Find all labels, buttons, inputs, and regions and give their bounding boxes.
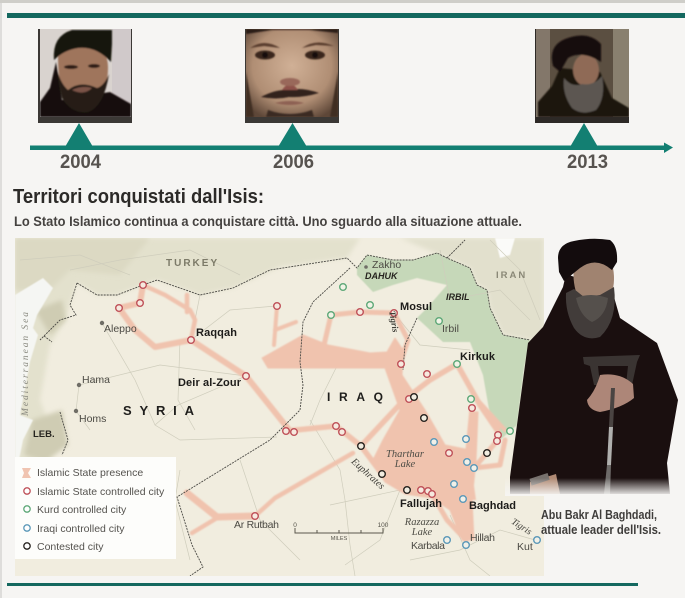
legend <box>15 457 176 559</box>
year 2004: 2004 <box>60 152 101 173</box>
map labels: Ar Rutbah <box>234 519 279 531</box>
cities: Islamic State controlled <box>116 282 501 519</box>
map labels: Hillah <box>470 532 495 544</box>
year 2013: 2013 <box>567 152 608 173</box>
map labels: Kirkuk <box>460 351 496 363</box>
map labels: Euphrates <box>348 456 387 492</box>
map labels: IRAN <box>496 270 527 281</box>
map of Syria and Iraq <box>15 238 544 576</box>
map labels: Zakho <box>372 259 401 271</box>
map labels: Tharthar <box>386 449 425 460</box>
Kurdish region <box>357 253 530 440</box>
timeline arrow <box>30 142 673 153</box>
map labels: Mosul <box>400 301 432 313</box>
portrait 2013 <box>535 29 629 123</box>
map labels: Kut <box>517 541 533 553</box>
map labels: TURKEY <box>166 258 219 269</box>
map labels <box>21 258 533 553</box>
map labels: Karbala <box>411 540 445 552</box>
subheading: Lo Stato Islamico continua a conquistare città. Uno sguardo alla situazione attuale. <box>14 213 522 229</box>
scale bar: MILES <box>331 536 348 542</box>
heading: Territori conquistati dall'Isis: <box>13 185 264 208</box>
map labels: DAHUK <box>365 271 399 281</box>
map labels: Lake <box>411 527 433 538</box>
legend: Islamic State controlled city: Islamic State controlled city <box>37 486 165 498</box>
map labels: Homs <box>79 413 106 425</box>
caption <box>541 507 661 537</box>
year 2006: 2006 <box>273 152 314 173</box>
map labels: Tigris <box>387 310 401 334</box>
map labels: Aleppo <box>104 323 137 335</box>
legend: Contested city: Contested city <box>37 541 104 553</box>
portrait 2006 <box>245 29 339 123</box>
map labels: Fallujah <box>400 498 442 510</box>
map labels: IRBIL <box>446 292 470 302</box>
marker 2006 <box>278 123 307 147</box>
map labels: Baghdad <box>469 500 516 512</box>
map labels: IRAQ <box>327 390 383 404</box>
caption: attuale leader dell'Isis. <box>541 522 661 537</box>
map labels: SYRIA <box>123 403 195 418</box>
Islamic State presence areas <box>119 285 505 540</box>
bottom rule <box>7 583 638 586</box>
portrait: Abu Bakr Al Baghdadi <box>505 239 685 496</box>
map labels: Irbil <box>442 323 459 335</box>
map labels: LEB. <box>33 429 55 440</box>
caption: Abu Bakr Al Baghdadi, <box>541 507 657 522</box>
road network <box>20 240 540 576</box>
cities: contested <box>358 394 490 493</box>
top rule <box>7 13 685 18</box>
portrait 2004 <box>38 29 132 123</box>
terrain: Turkey and west <box>15 238 360 470</box>
map labels: Tigris <box>509 517 533 538</box>
map labels: Hama <box>82 374 110 386</box>
map labels: Lake <box>394 459 416 470</box>
map labels: Raqqah <box>196 327 237 339</box>
cities: Kurd controlled <box>328 284 513 434</box>
timeline <box>30 123 673 173</box>
marker 2004 <box>65 123 93 147</box>
cities: Iraqi controlled <box>431 436 540 548</box>
map labels: Deir al-Zour <box>178 377 242 389</box>
scale bar: 0 <box>293 522 297 529</box>
legend: Iraqi controlled city: Iraqi controlled city <box>37 523 125 535</box>
scale bar <box>294 522 388 540</box>
scale bar: 100 <box>378 522 389 529</box>
map labels: Razazza <box>404 517 439 528</box>
borders <box>40 240 530 576</box>
map labels: Mediterranean Sea <box>21 312 31 417</box>
marker 2013 <box>570 123 598 147</box>
reference dots <box>74 265 368 413</box>
legend: Kurd controlled city: Kurd controlled city <box>37 504 127 516</box>
sea <box>15 278 53 470</box>
legend: Islamic State presence: Islamic State presence <box>37 467 143 479</box>
